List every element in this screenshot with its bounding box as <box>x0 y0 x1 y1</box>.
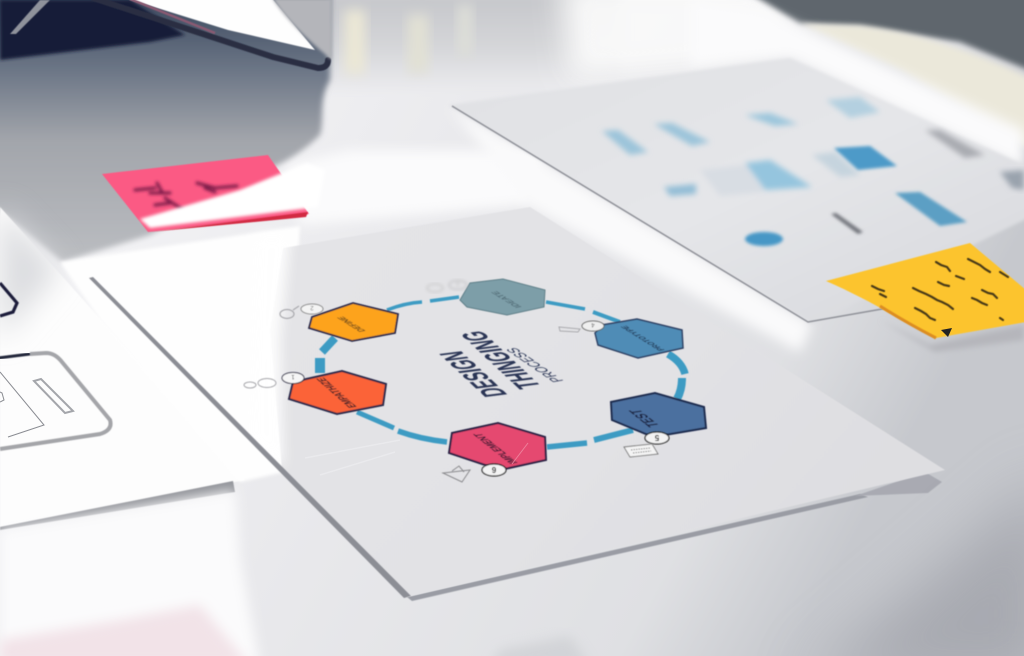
hinge shadow <box>272 0 332 60</box>
sticky note shadow <box>880 320 1024 352</box>
main sheet bottom shadow <box>407 494 868 601</box>
label: PROTOTYPE <box>619 325 667 351</box>
main sheet <box>89 207 945 598</box>
number badge 4 <box>582 321 604 331</box>
faint strokes on sheet <box>305 440 400 475</box>
laptop screen <box>125 0 315 50</box>
laptop base streak <box>10 0 50 34</box>
pink note body <box>102 155 309 232</box>
number: 4 <box>591 321 595 327</box>
bottom blur shape <box>490 636 590 656</box>
wireframe icon fragment <box>0 283 17 316</box>
number badge 3 <box>449 280 467 290</box>
desk shadow bottom right <box>800 470 1024 656</box>
shaded area of sheet <box>270 207 945 597</box>
label: TEST <box>625 409 663 428</box>
main sheet lit background <box>60 226 300 482</box>
lit wedge <box>0 207 60 340</box>
left sun blend <box>250 235 290 468</box>
laptop <box>0 0 332 68</box>
number: 6 <box>491 465 496 474</box>
sticky note body <box>826 243 1024 338</box>
number: 3 <box>456 280 459 286</box>
label: EMPATHIZE <box>314 377 360 408</box>
lower sunlight on desk <box>0 490 260 656</box>
number badge 1 <box>282 372 304 384</box>
background: dark corner top right <box>745 0 1024 72</box>
main sheet edge shadow <box>89 277 411 598</box>
number badge 6 <box>482 464 506 476</box>
paper sheet <box>0 207 245 527</box>
ring connector <box>320 297 685 447</box>
white glare above wireframe sheet <box>690 0 1024 170</box>
icon: empathize face <box>244 378 276 388</box>
bottom-left pink blur <box>0 605 250 656</box>
desk shadow area top left <box>0 0 330 262</box>
background: mug and blurred objects <box>285 0 810 225</box>
title line: thinging: THINGING <box>454 329 549 390</box>
phone bar <box>34 379 73 413</box>
sticky note fold <box>880 306 936 338</box>
white band between the two sheets <box>448 105 812 352</box>
left white paper <box>0 207 245 530</box>
label: DEFINE <box>335 316 368 332</box>
hexagon: implement <box>449 423 546 470</box>
phone frame <box>0 353 111 449</box>
icon: ideate bulb <box>427 284 443 292</box>
hexagon: define <box>309 303 398 341</box>
phone inner box <box>0 372 44 437</box>
icon: define magnifier <box>280 306 299 318</box>
icon: test clipboard <box>624 444 658 457</box>
white paper glare over note <box>140 163 325 228</box>
paper underside shadow <box>0 481 235 530</box>
hexagon: ideate <box>460 279 545 315</box>
number: 2 <box>310 304 314 310</box>
label: IDEATE <box>488 290 524 309</box>
sheet body <box>448 58 1024 324</box>
sheet shadow edge <box>452 106 905 322</box>
number badge 5 <box>645 432 669 444</box>
title line: design: DESIGN <box>433 350 515 398</box>
laptop edge <box>93 0 328 68</box>
pink sticky note <box>102 155 325 232</box>
laptop edge pink reflection <box>130 0 215 33</box>
sticky handwriting <box>872 259 1008 320</box>
yellow sticky note <box>826 243 1024 352</box>
hexagon: prototype <box>595 319 683 358</box>
background: cream plate top right <box>800 24 1024 150</box>
number badge 2 <box>301 304 323 314</box>
hexagon: test <box>611 393 706 437</box>
wireframe sheet <box>448 58 1024 324</box>
wireframe blue blocks <box>602 97 985 196</box>
title <box>433 329 567 398</box>
icon: implement pyramid <box>443 466 470 482</box>
pink note red edge <box>150 212 308 232</box>
number: 1 <box>291 373 295 379</box>
sheet sunlit streak on implement <box>512 443 528 464</box>
icon: prototype tool <box>559 327 580 332</box>
laptop dark underside <box>0 0 185 60</box>
sticky note mark <box>941 328 952 337</box>
hexagon: empathize <box>289 371 386 414</box>
pink note writing <box>135 183 237 210</box>
title line: process: PROCESS <box>502 347 567 383</box>
label: IMPLEMENT <box>471 432 521 464</box>
number: 5 <box>654 433 659 442</box>
